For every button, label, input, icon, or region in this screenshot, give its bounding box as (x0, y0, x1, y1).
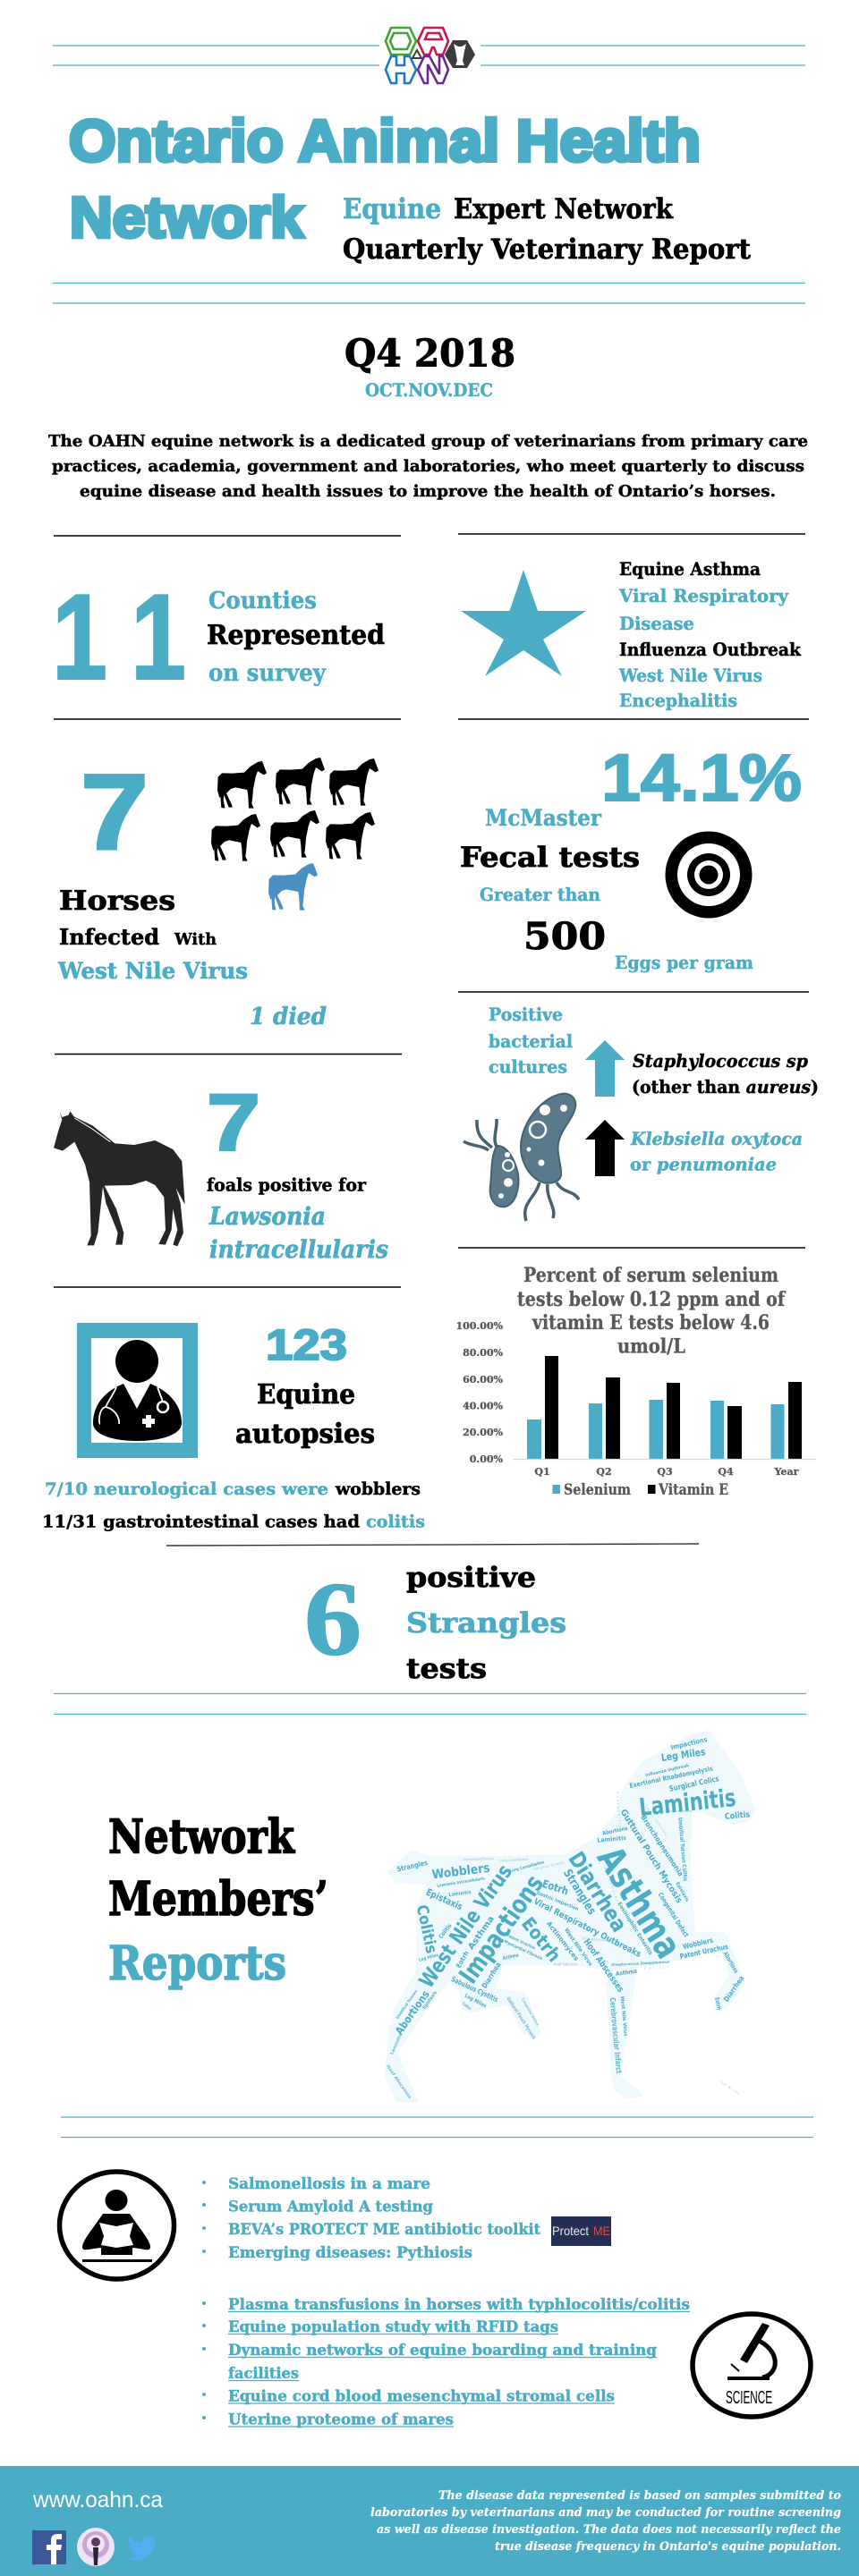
heading: network members reports: Network (108, 1810, 295, 1864)
icon: foal (54, 1111, 185, 1246)
title: Network (70, 185, 303, 250)
text: foals positive: Lawsonia (208, 1203, 326, 1231)
icon: target (666, 832, 752, 918)
y axis labels: 0.00% (470, 1453, 504, 1465)
text: positive strangles tests: tests (406, 1653, 487, 1685)
icon: star (461, 570, 586, 676)
word cloud terms: Pharyngitis (616, 1792, 622, 1828)
text: positive bacterial cultures: Positive (489, 1004, 563, 1025)
text: horses infected: With (174, 930, 217, 949)
chart title: umol/L (617, 1335, 685, 1358)
text: neurological cases: 7/10 neurological cases were (45, 1479, 328, 1499)
report items (228, 2175, 540, 2261)
y axis labels: 80.00% (463, 1347, 504, 1359)
word cloud terms: Lawsonia Intracellularis (437, 1876, 485, 1889)
panel: fecal tests (460, 741, 802, 973)
report items: BEVA’s PROTECT ME antibiotic toolkit (228, 2221, 540, 2238)
link underlines (228, 2311, 690, 2427)
x axis labels: Q4 (718, 1466, 734, 1478)
text: gastrointestinal cases: 11/31 gastrointestinal cases had (42, 1512, 360, 1531)
list: reported diseases: Viral Respiratory (618, 585, 789, 606)
icon: facebook (32, 2530, 66, 2564)
word cloud terms: Hoof Abscess (553, 1962, 577, 1966)
title (69, 107, 701, 250)
panel: autopsies (42, 1322, 425, 1531)
word cloud terms: Impactions (453, 1869, 549, 1989)
word cloud terms: Congenital Defect (521, 1997, 540, 2027)
list: reported diseases: Influenza Outbreak (619, 639, 802, 660)
section rules (54, 534, 809, 1287)
word cloud terms: West Nile Virus (563, 1928, 594, 1968)
word cloud terms: Laminitis (597, 1835, 626, 1844)
word cloud terms: Exertional Rhabdomyolysis (629, 1764, 714, 1790)
text: mcmaster fecal tests: Eggs per gram (615, 952, 753, 973)
bullets (202, 2181, 206, 2253)
report items: Salmonellosis in a mare (228, 2175, 430, 2192)
word cloud terms: Lung Consolidation (509, 1860, 545, 1874)
panel: west nile virus (57, 752, 378, 1030)
icon: OAHN logo (386, 28, 475, 83)
word cloud terms: Colitis (438, 1922, 454, 1940)
word cloud terms: Wobblers (431, 1861, 490, 1882)
word cloud terms: Epistaxis (422, 1990, 438, 2011)
word cloud terms (385, 1735, 751, 2100)
disclaimer: true disease frequency in Ontario's equine population. (495, 2540, 841, 2554)
text: mcmaster fecal tests (460, 805, 753, 973)
text: klebsiella: or penumoniae (630, 1154, 777, 1175)
text: counties represented (207, 588, 385, 687)
text: mcmaster fecal tests: Greater than (480, 884, 600, 905)
word cloud terms: Asthma (466, 1914, 497, 1952)
icon: science microscope (693, 2314, 811, 2417)
website: www.oahn.ca (32, 2487, 163, 2512)
text: horses infected: 1 died (250, 1004, 327, 1030)
heading: quarter: Q4 2018 (344, 331, 515, 376)
text: foals positive: intracellularis (209, 1236, 388, 1264)
heading: network members reports: Reports (108, 1936, 286, 1991)
horse silhouette (385, 1730, 756, 2102)
number: 14.1 percent: 14.1% (601, 741, 802, 815)
subtitle (343, 193, 752, 266)
text: foals positive: foals positive for (207, 1174, 366, 1195)
disclaimer: laboratories by veterinarians and may be conducted for routine screening (370, 2506, 841, 2520)
word cloud terms: Abortions (393, 1988, 432, 2037)
word cloud terms: Myocardial Fibrosis (464, 1857, 494, 1861)
text: klebsiella (630, 1128, 803, 1175)
link items: facilities (228, 2365, 299, 2382)
heading: network members reports: Members’ (108, 1872, 328, 1927)
list: research links (202, 2296, 690, 2428)
word cloud terms: Wobblers (682, 1936, 714, 1951)
intro paragraph: practices, academia, government and laboratories, who meet quarterly to discuss (52, 457, 804, 476)
word cloud terms: Laminitis (448, 1890, 472, 1898)
text: positive strangles tests: positive (406, 1562, 536, 1594)
intro paragraph (48, 432, 808, 501)
word cloud terms: Sabulous Cystitis (533, 1861, 565, 1871)
word cloud terms: Colics (461, 2001, 472, 2012)
word cloud terms: West Nile Virus (413, 1860, 517, 1993)
word cloud terms: Colitis Laminitis (644, 1805, 668, 1836)
number: 7 foals: 7 (207, 1079, 260, 1168)
text: staphylococcus (632, 1050, 819, 1097)
text: positive strangles tests: Strangles (406, 1607, 566, 1640)
word cloud terms: Abortions (602, 1826, 629, 1837)
disclaimer (370, 2489, 841, 2554)
text: neurological cases: wobblers (335, 1479, 421, 1499)
footer band (0, 2466, 859, 2576)
word cloud terms: Epistaxis (675, 1882, 690, 1902)
list: member reports (202, 2175, 540, 2261)
report items: Serum Amyloid A testing (228, 2199, 433, 2215)
icon: twitter (128, 2536, 157, 2561)
word cloud terms: Bronchopneumonia (639, 1813, 685, 1877)
word cloud terms: Laminitis (638, 1784, 737, 1822)
word cloud terms: Epistaxis (424, 1886, 464, 1912)
text: positive strangles tests (406, 1562, 566, 1685)
word cloud terms: Diarrhea (722, 1974, 745, 2004)
text: counties represented: Represented (207, 620, 385, 651)
panel: strangles (304, 1560, 566, 1685)
word cloud terms: Diarrhea (481, 1961, 503, 1990)
text: positive bacterial cultures: cultures (489, 1055, 567, 1077)
text: counties represented: Counties (208, 588, 317, 614)
word cloud terms: Sabulous Cystitis (450, 1975, 499, 2004)
y axis labels: 20.00% (463, 1427, 504, 1438)
number: 11 counties (52, 569, 186, 705)
rule above strangles (166, 1544, 699, 1546)
word cloud terms: Guttural Pouch Mycosis (618, 1808, 685, 1905)
word cloud terms: Abortions (722, 1951, 740, 1975)
icon: seven horses (211, 758, 378, 911)
icon: science microscope: SCIENCE (726, 2388, 772, 2408)
x axis labels: Q3 (657, 1466, 673, 1478)
text: equine autopsies: Equine (257, 1379, 355, 1411)
word cloud terms: Colitis (724, 1809, 751, 1822)
word cloud terms: Diarrhea (563, 1847, 633, 1936)
text: gastrointestinal cases: colitis (366, 1512, 425, 1531)
y axis labels (455, 1320, 504, 1465)
word cloud terms: Colitis (420, 1919, 424, 1936)
list: reported diseases: Disease (619, 613, 694, 634)
list: reported diseases: Equine Asthma (619, 558, 761, 580)
word cloud terms: Eotrh (540, 1877, 570, 1897)
x axis labels: Q2 (596, 1466, 612, 1478)
text: positive bacterial cultures (489, 1004, 573, 1077)
link items: Equine population study with RFID tags (228, 2318, 558, 2335)
word cloud terms: Lung Consolidation (500, 1858, 529, 1862)
text: mcmaster fecal tests: Fecal tests (460, 842, 640, 874)
word cloud terms: Umbilical Torsion (395, 1989, 418, 2020)
word cloud terms: Impactions (670, 1735, 709, 1751)
word cloud terms: Strangles (396, 1859, 429, 1874)
chart title: vitamin E tests below 4.6 (532, 1311, 770, 1335)
word cloud terms: West Nile Virus (619, 1996, 628, 2037)
subtitle: Equine (343, 193, 441, 225)
badge: protect me (551, 2216, 611, 2246)
x axis labels (534, 1466, 799, 1478)
panel: lawsonia foals (54, 1079, 388, 1264)
word cloud terms: Strangles (560, 1868, 599, 1918)
word cloud terms: Colitis (412, 1903, 440, 1955)
report items: Emerging diseases: Pythiosis (228, 2244, 472, 2261)
word cloud terms: Leg Miles (418, 1953, 439, 1963)
bar chart: selenium and vitamin E (455, 1264, 816, 1499)
title: Ontario Animal Health (69, 107, 701, 174)
text: horses infected: West Nile Virus (57, 958, 248, 984)
x axis labels: Q1 (534, 1466, 550, 1478)
word cloud terms: Viral Respiratory (583, 1936, 611, 1943)
vitamin E bars (545, 1356, 802, 1459)
icon: reader (59, 2172, 174, 2279)
panel: counties (52, 569, 385, 705)
text: horses infected: Infected (59, 924, 159, 950)
legend (553, 1481, 728, 1499)
word cloud terms: Gastric Impaction (536, 1891, 579, 1912)
arrow: up black (585, 1120, 625, 1176)
text: mcmaster fecal tests: McMaster (485, 805, 602, 831)
word cloud terms: Asthma (502, 1953, 520, 1962)
text: foals positive (207, 1174, 388, 1264)
text: horses infected (57, 886, 327, 1030)
legend: Selenium (564, 1481, 631, 1499)
subtitle: Expert Network (454, 193, 674, 225)
number: 123 autopsies: 123 (266, 1322, 347, 1369)
word cloud terms: Streptococcus Zooepidemicus (611, 1960, 670, 1967)
badge: protect me: Protect (552, 2224, 589, 2238)
word cloud terms: Colitis (644, 1966, 668, 1970)
intro paragraph: The OAHN equine network is a dedicated group of veterinarians from primary care (48, 432, 808, 451)
heading: quarter: OCT.NOV.DEC (365, 379, 493, 401)
y axis labels: 40.00% (463, 1401, 504, 1411)
list: reported diseases: West Nile Virus (618, 665, 762, 686)
intro paragraph: equine disease and health issues to improve the health of Ontario’s horses. (80, 482, 776, 501)
word cloud terms: Hoof Abscesses (582, 1937, 625, 1995)
x axis labels: Year (774, 1466, 799, 1478)
word cloud terms: Eotrh (517, 1913, 566, 1966)
header rules (53, 46, 805, 303)
word cloud terms: Viral Respiratory Outbreaks (532, 1897, 642, 1960)
section rules (54, 1694, 813, 2138)
number: 6 strangles: 6 (304, 1560, 361, 1678)
link items: Equine cord blood mesenchymal stromal cells (228, 2388, 615, 2404)
text: positive bacterial cultures: bacterial (489, 1030, 573, 1052)
text: staphylococcus: (other than aureus) (632, 1076, 819, 1097)
word cloud terms: Asthma (589, 1839, 690, 1966)
text: staphylococcus: Staphylococcus sp (633, 1050, 808, 1072)
text: mcmaster fecal tests: 500 (523, 915, 606, 958)
word cloud terms: Leg Miles (719, 2079, 740, 2096)
text: equine autopsies (235, 1379, 375, 1450)
number: 7 horses: 7 (81, 752, 149, 872)
word cloud terms: Umbilical Torsion Colitis (676, 1817, 688, 1882)
chart title (517, 1264, 786, 1358)
word cloud terms: Laminitis (389, 2032, 404, 2055)
word cloud terms: Congenital Defect (657, 1891, 691, 1939)
subtitle: Quarterly Veterinary Report (343, 233, 752, 266)
bullets (202, 2301, 206, 2419)
y axis labels: 60.00% (463, 1374, 504, 1385)
word cloud terms: Patent Urachus (679, 1943, 729, 1961)
word cloud terms: Actinomyces (545, 1919, 581, 1962)
word cloud terms: Influenza Outbreak (645, 1763, 691, 1778)
chart title: Percent of serum selenium (523, 1264, 778, 1287)
legend: Vitamin E (658, 1481, 728, 1499)
icon: podcast (77, 2528, 115, 2566)
word cloud terms: Cerebrovascular Infarct (608, 1997, 623, 2073)
word cloud terms: Asthma (616, 1968, 637, 1978)
word cloud terms: Leg Miles (464, 1993, 488, 2010)
word cloud terms: Actinomyces (603, 1867, 619, 1902)
x axis (514, 1458, 816, 1460)
link items (228, 2296, 690, 2428)
text: equine autopsies: autopsies (235, 1419, 375, 1450)
heading: quarter (344, 331, 515, 401)
panel: top diseases (461, 558, 802, 711)
disclaimer: as well as disease investigation. The data does not necessarily reflect the (377, 2523, 841, 2537)
word cloud terms: Surgical Colics (668, 1775, 720, 1794)
word cloud terms: Leg Miles (660, 1745, 707, 1764)
word cloud horse (385, 1730, 756, 2102)
word cloud terms: Myocardial Fibrosis (503, 1939, 543, 1962)
list: reported diseases (618, 558, 802, 711)
word cloud terms: Patent Urachus (506, 1933, 536, 1951)
chart title: tests below 0.12 ppm and of (517, 1288, 786, 1311)
word cloud terms: Eotrh (713, 1996, 722, 2011)
word cloud terms: Eotrh (455, 1949, 471, 1970)
word cloud terms: Eosinophilic Enteritis (616, 1901, 654, 1956)
y axis labels: 100.00% (455, 1320, 504, 1332)
number: 11 counties: 1 (131, 569, 186, 705)
heading: network members reports (108, 1810, 328, 1991)
list: reported diseases: Encephalitis (619, 690, 737, 711)
link items: Uterine proteome of mares (228, 2411, 454, 2428)
disclaimer: The disease data represented is based on samples submitted to (438, 2489, 841, 2503)
selenium bars (527, 1400, 784, 1459)
text: horses infected: Horses (59, 886, 175, 917)
text: klebsiella: Klebsiella oxytoca (630, 1128, 803, 1149)
word cloud terms: Hoof Abscesses (385, 2064, 412, 2100)
word cloud terms: Guttural Pouch Mycosis (505, 1996, 536, 2040)
word cloud terms: Eotrh Asthma Impactions (656, 1809, 693, 1813)
badge: protect me: ME (593, 2224, 610, 2238)
icon: veterinarian (77, 1323, 198, 1458)
text: counties represented: on survey (208, 660, 327, 687)
link items: Dynamic networks of equine boarding and training (228, 2342, 657, 2359)
arrow: up teal (585, 1040, 625, 1097)
panel: bacterial cultures (464, 1004, 819, 1221)
number: 11 counties: 1 (52, 569, 107, 705)
link items: Plasma transfusions in horses with typhlocolitis/colitis (228, 2296, 690, 2313)
icon: bacteria (464, 1094, 579, 1221)
